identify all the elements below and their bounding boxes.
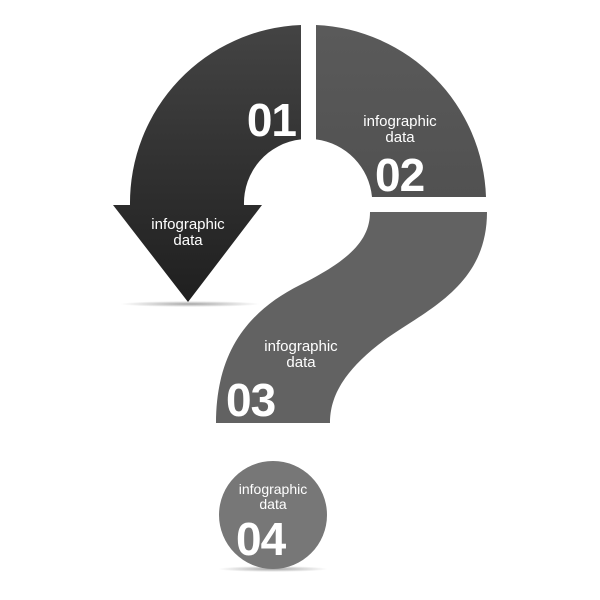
panel 02: quarter arc: infographic: [363, 113, 437, 130]
panel 03: S curve: infographic: [264, 338, 338, 355]
panel 03: S curve: data: [286, 354, 316, 371]
number 01: 01: [247, 94, 296, 146]
number 04: 04: [236, 513, 287, 565]
arrow text: infographic: [151, 216, 225, 233]
panel 03: S curve: [216, 212, 487, 426]
panel 02: quarter arc: data: [385, 129, 415, 146]
panel 04: circle: [218, 461, 328, 572]
panel 02: quarter arc: [316, 25, 486, 201]
panel 04: circle: data: [259, 496, 287, 512]
number 02: 02: [375, 149, 424, 201]
number 03: 03: [226, 374, 275, 426]
panel 01: arrow arc: [113, 25, 301, 307]
panel 04: circle: infographic: [239, 481, 307, 497]
arrow text: data: [173, 232, 203, 249]
